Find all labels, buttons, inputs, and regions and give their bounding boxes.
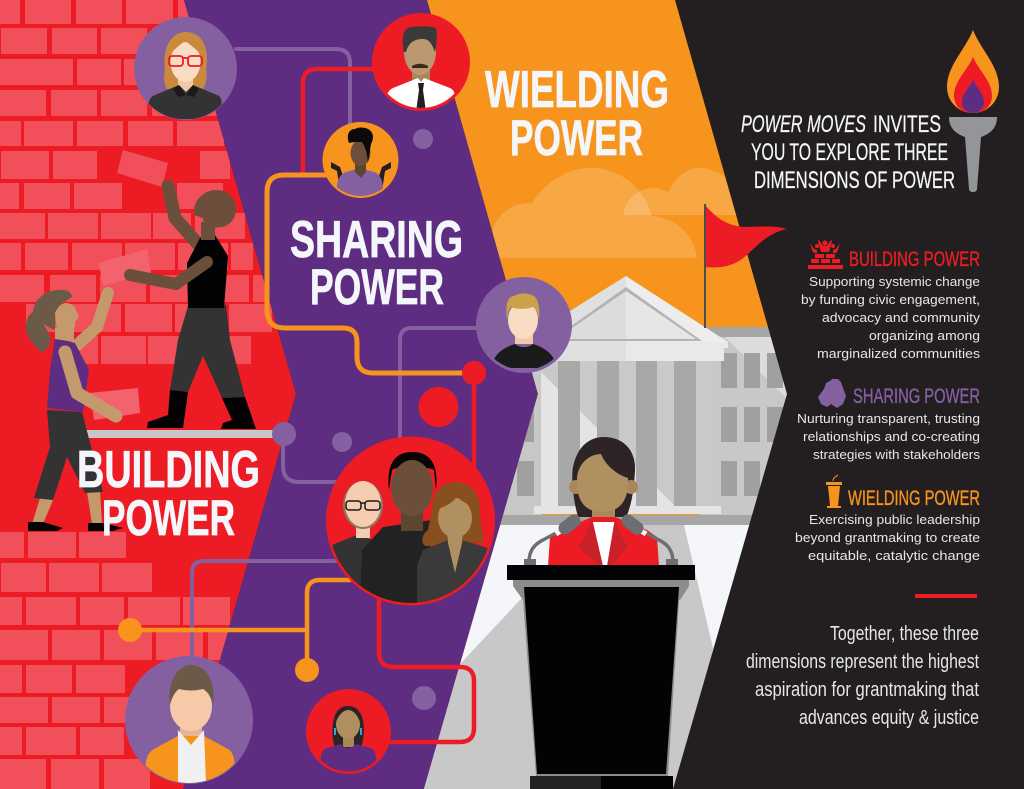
colonnade xyxy=(541,361,713,506)
upper brick xyxy=(117,150,168,187)
icon: people on bricks xyxy=(808,240,843,269)
avatar: man with moustache xyxy=(372,13,470,112)
builders xyxy=(26,150,296,531)
legend: wielding power xyxy=(795,475,980,563)
icon: torch xyxy=(947,30,999,192)
heading: wielding power: POWER xyxy=(510,110,643,166)
avatar: blond man xyxy=(476,277,572,373)
man builder xyxy=(99,186,256,429)
avatar: group of three xyxy=(326,436,495,606)
flag xyxy=(704,204,787,328)
legend: building power xyxy=(801,240,981,361)
description: Exercising public leadership xyxy=(809,512,980,527)
closing statement: advances equity & justice xyxy=(799,707,979,729)
description xyxy=(801,274,981,361)
heading: building power: POWER xyxy=(102,490,235,546)
heading: building power: BUILDING xyxy=(77,441,260,499)
man legs xyxy=(170,305,245,398)
front arm xyxy=(130,262,207,284)
shoes xyxy=(28,522,123,531)
raised arm xyxy=(168,186,198,244)
heading: building power xyxy=(77,441,260,546)
closing statement: aspiration for grantmaking that xyxy=(755,679,979,701)
icon: lectern xyxy=(826,475,842,508)
woman bare legs xyxy=(32,491,102,524)
raised arm xyxy=(76,293,108,346)
description: by funding civic engagement, xyxy=(801,292,980,307)
person with glasses xyxy=(332,481,383,600)
jacket xyxy=(548,517,659,566)
head xyxy=(26,290,79,353)
description: strategies with stakeholders xyxy=(813,447,981,462)
intro text: INVITES xyxy=(873,111,941,138)
heading: wielding power: WIELDING xyxy=(485,61,669,119)
street band xyxy=(500,515,752,525)
torso xyxy=(187,235,228,308)
brick wall xyxy=(0,0,273,789)
second brick xyxy=(99,249,151,286)
connector dots xyxy=(118,129,486,710)
red lines xyxy=(303,69,474,742)
closing statement xyxy=(746,623,979,729)
woman builder xyxy=(26,290,123,531)
avatar: person in wheelchair xyxy=(322,122,398,198)
divider xyxy=(915,594,977,598)
panel: wielding power background xyxy=(420,0,800,789)
boots xyxy=(147,390,188,428)
woman xyxy=(417,482,488,605)
centre person xyxy=(360,452,437,605)
description xyxy=(797,411,981,462)
intro text: POWER MOVES xyxy=(741,111,866,138)
description xyxy=(795,512,980,563)
heading: wielding power xyxy=(485,61,669,166)
avatar: woman in purple xyxy=(306,689,391,774)
ground xyxy=(424,525,750,789)
building xyxy=(500,276,787,525)
right wing xyxy=(700,327,787,515)
connector lines xyxy=(130,49,477,742)
pants xyxy=(34,410,103,500)
head xyxy=(194,190,236,240)
lower arm xyxy=(65,352,116,416)
speaker xyxy=(524,437,678,567)
description: organizing among xyxy=(869,328,980,343)
intro text xyxy=(741,111,955,194)
spotlight xyxy=(424,525,713,789)
panel: building power background xyxy=(0,0,296,789)
heading: sharing power: SHARING xyxy=(290,211,463,269)
clouds xyxy=(487,168,745,258)
face xyxy=(569,454,638,512)
left wing xyxy=(503,370,542,515)
microphones xyxy=(529,521,673,562)
carried brick xyxy=(90,388,140,420)
orange lines xyxy=(130,175,464,660)
avatar: man in orange jacket xyxy=(125,656,253,784)
hair xyxy=(572,437,635,517)
heading: sharing power: POWER xyxy=(310,259,444,315)
scaffold bar xyxy=(63,430,278,438)
icon: clasped hands xyxy=(818,379,846,408)
description: advocacy and community xyxy=(822,310,981,325)
panel: dark intro side xyxy=(673,0,1024,789)
top xyxy=(47,338,89,412)
description: equitable, catalytic change xyxy=(808,548,980,563)
pediment xyxy=(556,276,728,361)
closing statement: Together, these three xyxy=(830,623,979,645)
panel: sharing power background xyxy=(183,0,538,789)
avatar: woman with glasses xyxy=(134,17,237,120)
description: Nurturing transparent, trusting xyxy=(797,411,980,426)
description: Supporting systemic change xyxy=(809,274,980,289)
node xyxy=(272,422,296,446)
description: relationships and co-creating xyxy=(803,429,980,444)
purple lines xyxy=(192,49,477,662)
legend: sharing power xyxy=(797,379,981,462)
podium xyxy=(507,565,695,789)
description: beyond grantmaking to create xyxy=(795,530,980,545)
heading: sharing power xyxy=(290,211,463,315)
base xyxy=(534,506,721,514)
neck xyxy=(592,500,615,530)
description: marginalized communities xyxy=(817,346,981,361)
